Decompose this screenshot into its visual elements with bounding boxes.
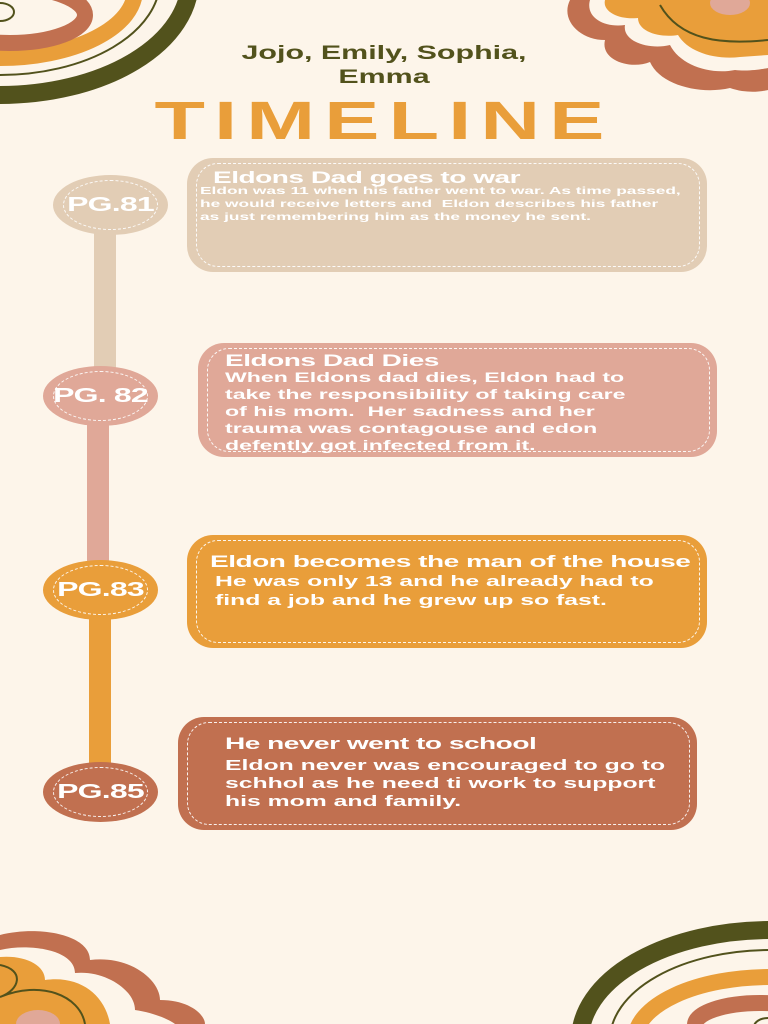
panel: dad dies (198, 343, 717, 457)
panel: never went to school: Eldon never was encouraged to go to (225, 757, 665, 774)
panel: dad dies: Eldons Dad Dies (225, 351, 439, 370)
marker: PG.81 (53, 175, 168, 235)
marker: PG.83: PG.83 (57, 579, 144, 601)
marker: PG.85: PG.85 (57, 781, 144, 803)
decoration: top-left arcs (0, 0, 196, 104)
timeline lines (94, 230, 116, 370)
panel: man of the house: He was only 13 and he already had to (215, 573, 654, 590)
marker: PG.81: PG.81 (67, 194, 154, 216)
decoration: bottom-left flower (0, 931, 205, 1024)
authors (242, 43, 526, 88)
marker: PG.82 (43, 366, 158, 426)
marker: PG.85 (43, 762, 158, 822)
panel: dad goes to war: Eldons Dad goes to war (213, 168, 520, 187)
panel: dad goes to war: Eldon was 11 when his father went to war. As time passed, (200, 185, 681, 197)
panel: dad dies: When Eldons dad dies, Eldon had to (225, 369, 624, 385)
panel: dad dies: take the responsibility of taking care (225, 386, 626, 402)
panel: dad dies: defently got infected from it. (225, 437, 536, 453)
panel: dad goes to war: as just remembering him as the money he sent. (200, 211, 591, 223)
marker: PG.82: PG. 82 (53, 385, 148, 407)
marker: PG.83 (43, 560, 158, 620)
decoration: bottom-right arcs (572, 921, 768, 1024)
panel: dad dies: of his mom. Her sadness and her (225, 403, 595, 419)
decoration: top-right flower (567, 0, 768, 92)
authors: Emma (338, 67, 430, 88)
panel: never went to school: schhol as he need ti work to support (225, 775, 655, 792)
panel: man of the house: Eldon becomes the man of the house (210, 552, 690, 571)
title: TIMELINE (154, 91, 613, 151)
panel: man of the house (187, 535, 707, 648)
panel: never went to school: He never went to school (225, 734, 536, 753)
panel: dad goes to war: he would receive letters and Eldon describes his father (200, 198, 658, 210)
panel: dad goes to war (187, 158, 707, 272)
panel: never went to school: his mom and family. (225, 793, 461, 810)
panel: never went to school (178, 717, 697, 830)
authors: Jojo, Emily, Sophia, (242, 43, 526, 64)
panel: man of the house: find a job and he grew up so fast. (215, 592, 607, 609)
panel: dad dies: trauma was contagouse and edon (225, 420, 597, 436)
